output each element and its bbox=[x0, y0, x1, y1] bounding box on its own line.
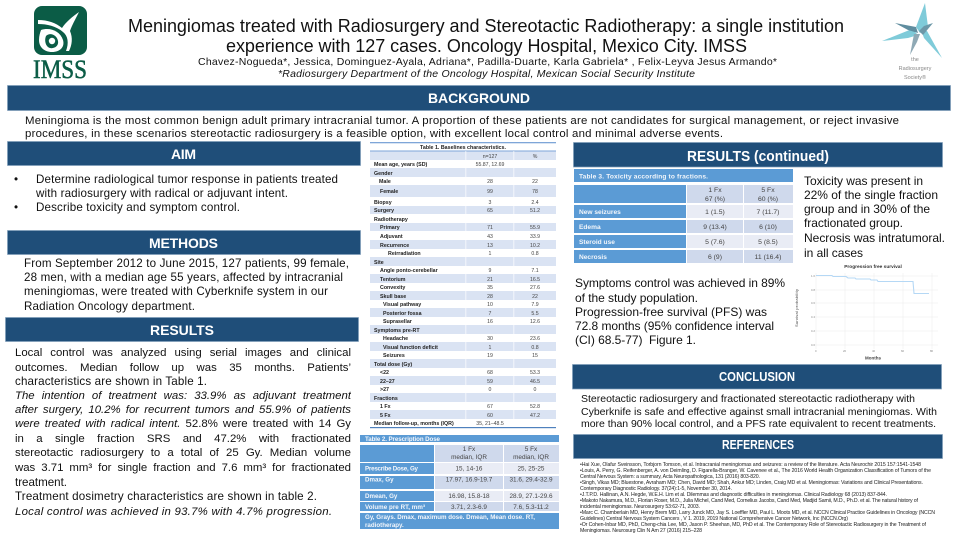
affiliation: *Radiosurgery Department of the Oncology Hospital, Mexican Social Security Institute bbox=[278, 68, 695, 80]
reference list: Central Nervous System: a summary, Acta Neuropathologica, 131 (2016) 803-820. bbox=[580, 474, 760, 480]
table 1 rows: 12.6 bbox=[530, 319, 540, 325]
axis labels: Months bbox=[865, 356, 881, 360]
table 1 rows: 3 bbox=[489, 200, 492, 206]
table 1 rows: Skull base bbox=[380, 294, 406, 300]
axis labels: 40 bbox=[872, 349, 876, 353]
table 1 rows: Gender bbox=[374, 171, 393, 177]
table 1 title: Table 1. Baselines characteristics. bbox=[420, 145, 506, 151]
symptoms and PFS text: Progression-free survival (PFS) was bbox=[575, 305, 767, 319]
table 1 rows: 16.5 bbox=[530, 277, 540, 283]
table 1 rows: Male bbox=[379, 179, 391, 185]
conclusion text: Cyberknife is safe and effective against small intracranial meningiomas. With bbox=[581, 406, 937, 418]
table 1 rows: 1 bbox=[489, 251, 492, 257]
table 1 rows: Tentorium bbox=[380, 277, 406, 283]
table 1 rows: Adjuvant bbox=[380, 234, 403, 240]
axis labels: 0 bbox=[815, 349, 817, 353]
panel: conclusion bbox=[572, 364, 942, 430]
table 2 text: 28.9, 27.1-29.6 bbox=[510, 493, 553, 500]
table 1 rows: Radiotherapy bbox=[374, 217, 408, 223]
table 1 rows: 43 bbox=[487, 234, 493, 240]
table 3 text: 1 (1.5) bbox=[705, 209, 725, 216]
panel: background bbox=[8, 86, 950, 140]
heading: background: BACKGROUND bbox=[428, 90, 530, 106]
table 3 text: Steroid use bbox=[579, 239, 615, 246]
methods text: meningiomas, were treated with Cyberknife system in our bbox=[24, 285, 328, 298]
toxicity text bbox=[804, 174, 945, 260]
results text bbox=[15, 346, 351, 518]
results text: Local control was analyzed using serial images and clinical bbox=[15, 347, 351, 359]
heading: results: RESULTS bbox=[150, 322, 214, 338]
symptoms and PFS text: 72.8 months (95% confidence interval bbox=[575, 319, 774, 333]
results text: in a single fraction SRS and 47.2% with fractionated bbox=[15, 433, 351, 445]
table 3: toxicity bbox=[574, 169, 793, 263]
reference list: •Or Cohen-Inbar MD, PhD, Cheng-chia Lee, MD, Jason P. Sheehan, MD, PhD et al. The Contemporary Role of Stereotactic Radiosurgery in the Treatment of bbox=[580, 522, 927, 528]
symptoms and PFS text: Symptoms control was achieved in 89% bbox=[575, 276, 785, 290]
title: Meningiomas treated with Radiosurgery and Stereotactic Radiotherapy: a single institution bbox=[128, 16, 844, 36]
table 1 rows: 23.6 bbox=[530, 336, 540, 342]
table 1 rows: Convexity bbox=[380, 285, 405, 291]
table 2 text: Gy, Grays. Dmax, maximum dose. Dmean, Mean dose. RT, bbox=[365, 514, 535, 521]
table 2: prescription dose bbox=[360, 435, 559, 529]
results text: stereotactic radiosurgery to a total of 25 Gy. Median volume bbox=[15, 447, 351, 459]
table 1 rows: Site bbox=[374, 260, 384, 266]
aim bullets: • bbox=[14, 201, 18, 214]
table 1 rows: >27 bbox=[380, 387, 389, 393]
table 2 text: 15, 14-16 bbox=[455, 466, 483, 472]
table 3 label column bbox=[574, 185, 686, 263]
table 1 rows: 71 bbox=[487, 225, 493, 231]
heading: references: REFERENCES bbox=[722, 437, 794, 452]
table 1 rows: 35 bbox=[487, 285, 493, 291]
icon: Radiosurgery Society logo bbox=[882, 3, 942, 81]
table 1 rows: Symptoms pre-RT bbox=[374, 328, 420, 334]
table 1 rows: 55.9 bbox=[530, 225, 540, 231]
aim bullets: • bbox=[14, 173, 18, 186]
table 1 rows: Angle ponto-cerebellar bbox=[380, 268, 438, 274]
results text: treatment. bbox=[15, 476, 67, 489]
methods text: From September 2012 to June 2015, 127 patients, 99 female, bbox=[24, 257, 349, 270]
table 1 rows: 27.6 bbox=[530, 285, 540, 291]
background text bbox=[25, 115, 899, 140]
chart: progression-free survival bbox=[794, 264, 938, 360]
reference list: •Marc C. Chamberlain MD, Henry Brem MD, Larry Junck MD, Jay S. Loeffler MD, Paul L. Moots MD, et al. NCCN Clinical Practice Guidelines in Oncology (NCCN bbox=[580, 510, 935, 516]
table 1 rows: 28 bbox=[487, 179, 493, 185]
table 2 text: 31.6, 29.4-32.9 bbox=[510, 476, 553, 484]
table 1 rows: 22 bbox=[532, 179, 538, 185]
table 3 text: 6 (10) bbox=[759, 224, 777, 231]
table 3 text: 60 (%) bbox=[758, 196, 778, 203]
toxicity text: fractionated group. bbox=[804, 216, 903, 230]
aim bullets bbox=[14, 173, 338, 214]
reference list: Guidelines) Central Nervous System Cancers , V 1. 2019, 2019 National Comprehensive Cancer Network, Inc (NCCN.Org) bbox=[580, 516, 848, 522]
table 1 rows: 99 bbox=[487, 189, 493, 195]
icon: Radiosurgery Society logo: Society® bbox=[904, 74, 926, 81]
table 1 rows: 5.5 bbox=[531, 311, 539, 317]
toxicity text: in all cases bbox=[804, 246, 863, 260]
table 1 rows: 21 bbox=[487, 277, 493, 283]
table 3 text: 1 Fx bbox=[708, 187, 722, 194]
methods text bbox=[24, 257, 349, 313]
table 1 rows: Seizures bbox=[383, 353, 405, 359]
table 1 rows: Median follow-up, months (IQR) bbox=[374, 421, 454, 427]
table 1 rows: 7 bbox=[489, 311, 492, 317]
table 1 rows: 7.1 bbox=[531, 268, 539, 274]
results text: after surgery, 10.2% for recurrent tumors and 55.9% of patients bbox=[15, 404, 351, 416]
table 1 rows: 13 bbox=[487, 243, 493, 249]
symptoms and PFS text bbox=[575, 276, 785, 347]
axis labels: Survival probability bbox=[794, 289, 799, 327]
results text: was 3.71 mm³ for single fraction and 7.6 mm³ for fractionated bbox=[15, 462, 351, 474]
authors: Chavez-Nogueda*, Jessica, Dominguez-Ayala, Adriana*, Padilla-Duarte, Karla Gabriela* , Felix-Leyva Jesus Armando* bbox=[198, 56, 777, 68]
heading: results bbox=[6, 318, 358, 342]
table 1 rows: Reirradiation bbox=[388, 251, 421, 257]
symptoms and PFS text: (CI) 68.5-77) Figure 1. bbox=[575, 333, 696, 347]
table 1 rows: 59 bbox=[487, 379, 493, 385]
table 1 rows: n=127 bbox=[483, 154, 497, 160]
table 2 text: Dmean, Gy bbox=[365, 493, 398, 500]
results text: were treated with radical intent. 52.8% were treated with 14 Gy bbox=[15, 418, 351, 430]
logo wordmark: IMSS bbox=[33, 55, 87, 84]
table 2 text: 1 Fx bbox=[463, 446, 476, 453]
table 2 text: Prescribe Dose, Gy bbox=[365, 466, 419, 472]
icon: Radiosurgery Society logo: the bbox=[911, 57, 919, 63]
table 2 text: median, IQR bbox=[451, 454, 487, 461]
heading: background bbox=[8, 86, 950, 110]
table 1 rows: Fractions bbox=[374, 396, 398, 402]
heading: results continued bbox=[574, 142, 942, 167]
table 2 text: 3.71, 2.3-6.9 bbox=[451, 504, 487, 511]
table 1 rows: 0 bbox=[489, 387, 492, 393]
heading: aim: AIM bbox=[171, 146, 196, 162]
table 2 text: 16.98, 15.8-18 bbox=[448, 493, 490, 500]
table 1 rows: Recurrence bbox=[380, 243, 409, 249]
table 1 rows: Female bbox=[380, 189, 398, 195]
table 1 rows: % bbox=[533, 154, 538, 160]
table 1 rows: Posterior fossa bbox=[383, 311, 422, 317]
results text: Treatment dosimetry characteristics are shown in table 2. bbox=[15, 490, 317, 503]
table 2 text: Volume pre RT, mm³ bbox=[365, 504, 425, 511]
table 1 rows: Headache bbox=[383, 336, 408, 342]
table 1 rows: 0 bbox=[534, 387, 537, 393]
toxicity text: Necrosis was intratumoral. bbox=[804, 231, 945, 245]
chart title: Progression free survival bbox=[844, 264, 902, 270]
table 1 rows: Mean age, years (SD) bbox=[374, 162, 428, 168]
reference list bbox=[580, 462, 935, 534]
axis labels bbox=[794, 274, 934, 360]
axis labels: 0.4 bbox=[811, 315, 815, 319]
axis labels: 20 bbox=[843, 349, 847, 353]
table 3 value cells bbox=[687, 185, 793, 263]
table 1 rows: 65 bbox=[487, 208, 493, 214]
table 1 rows: 55.87, 12.69 bbox=[476, 162, 505, 168]
table 1 rows: 33.9 bbox=[530, 234, 540, 240]
conclusion text: more than 90% local control, and a PFS rate equivalent to recent treatments. bbox=[581, 418, 936, 430]
table 3 text: 5 (7.6) bbox=[705, 239, 725, 246]
table 1 rows: Visual function deficit bbox=[383, 345, 438, 351]
table 2 text: 5 Fx bbox=[525, 446, 538, 453]
table 1 rows: <22 bbox=[380, 370, 389, 376]
heading: aim bbox=[8, 142, 360, 166]
table 1 rows: 78 bbox=[532, 189, 538, 195]
table 1 rows: 9 bbox=[489, 268, 492, 274]
table 2 text: 25, 25-25 bbox=[517, 466, 545, 472]
axis labels: 1.0 bbox=[811, 274, 815, 278]
table 1: baseline characteristics bbox=[370, 142, 556, 428]
table 1 rows: Primary bbox=[380, 225, 400, 231]
symptoms and PFS text: of the study population. bbox=[575, 291, 698, 305]
table 1 rows: 67 bbox=[487, 404, 493, 410]
panel: results continued bbox=[574, 142, 945, 360]
table 2: prescription dose: Table 2. Prescription Dose bbox=[365, 436, 441, 443]
table 1 shaded rows bbox=[370, 152, 556, 419]
results text: The intention of treatment was: 33.9% as adjuvant treatment bbox=[15, 390, 351, 402]
survival curve bbox=[816, 276, 929, 294]
table 1 rows: 16 bbox=[487, 319, 493, 325]
axis labels: 0.6 bbox=[811, 301, 815, 305]
heading: results continued: RESULTS (continued) bbox=[687, 149, 829, 165]
table 2 text: radiotherapy. bbox=[365, 522, 404, 529]
heading: conclusion bbox=[572, 364, 942, 389]
table 3 text: 7 (11.7) bbox=[757, 209, 779, 216]
table 2 text: 7.6, 5.3-11.2 bbox=[513, 504, 549, 511]
methods text: Radiation Oncology department. bbox=[24, 300, 195, 313]
table 1 rows: Visual pathway bbox=[383, 302, 421, 308]
aim bullets: Determine radiological tumor response in patients treated bbox=[36, 173, 338, 186]
table 3 text: 9 (13.4) bbox=[703, 224, 727, 231]
icon: Radiosurgery Society logo: Radiosurgery bbox=[899, 66, 932, 72]
axis labels: 0.0 bbox=[811, 343, 815, 347]
table 2 text bbox=[365, 446, 553, 529]
toxicity text: group and in 30% of the bbox=[804, 202, 930, 216]
reference list: Meningiomas. Neurosurg Clin N Am 27 (2016) 215–228 bbox=[580, 528, 702, 534]
table 1 rows: 52.8 bbox=[530, 404, 540, 410]
table 1 rows: 47.2 bbox=[530, 413, 540, 419]
panel: methods bbox=[8, 230, 360, 313]
table 1 rows: 51.2 bbox=[530, 208, 540, 214]
panel: references bbox=[574, 434, 942, 534]
table 2 text: Dmax, Gy bbox=[365, 476, 394, 484]
title: experience with 127 cases. Oncology Hospital, Mexico City. IMSS bbox=[226, 36, 747, 56]
axis labels: 80 bbox=[930, 349, 934, 353]
table 1 rows: 22 bbox=[532, 294, 538, 300]
table 3 text: 5 (8.5) bbox=[758, 239, 778, 246]
table 1 rows: 0.8 bbox=[531, 251, 539, 257]
table 1 rows: 28 bbox=[487, 294, 493, 300]
table 1 rows: 46.5 bbox=[530, 379, 540, 385]
table 1 rows: 53.3 bbox=[530, 370, 540, 376]
table 1 rows: 2.4 bbox=[531, 200, 539, 206]
table 2 text: 17.97, 16.9-19.7 bbox=[446, 476, 493, 484]
table 2 label column bbox=[360, 445, 559, 529]
heading: methods: METHODS bbox=[149, 235, 218, 251]
table 3 text: 6 (9) bbox=[708, 254, 722, 261]
table 1 rows: 5 Fx bbox=[380, 413, 391, 419]
panel: aim bbox=[8, 142, 360, 214]
table 1 rows: 68 bbox=[487, 370, 493, 376]
table 1 rows: 7.9 bbox=[531, 302, 539, 308]
heading: references bbox=[574, 434, 942, 458]
axis labels: 0.2 bbox=[811, 329, 815, 333]
axis labels: 0.8 bbox=[811, 288, 815, 292]
table 1 rows: 10 bbox=[487, 302, 493, 308]
table 1 rows: 10.2 bbox=[530, 243, 540, 249]
axis labels: 60 bbox=[901, 349, 905, 353]
table 1 rows: 15 bbox=[532, 353, 538, 359]
table 1 rows bbox=[374, 154, 540, 427]
table 1 rows: 0.8 bbox=[531, 345, 539, 351]
reference list: Contemporary Diagnostic Radiology. 37(24):1-5, November 30, 2014. bbox=[580, 486, 732, 492]
table 1 rows: Surgery bbox=[374, 208, 394, 214]
conclusion text bbox=[581, 393, 937, 430]
table 1 rows: 22–27 bbox=[380, 379, 395, 385]
table 1 rows: 35, 21–48.5 bbox=[476, 421, 504, 427]
toxicity text: 22% of the single fraction bbox=[804, 188, 938, 202]
reference list: •Makoto Nakamura, M.D., Florian Roser, M.D., Julia Michel, Cand Med, Cornelius Jacobs, Cand Med, Madjid Samii, M.D., Ph.D. et al. The natural history of bbox=[580, 498, 919, 504]
aim bullets: with radiosurgery with radical or adjuvant intent. bbox=[35, 187, 288, 200]
table 3 text: 11 (16.4) bbox=[755, 254, 781, 261]
conclusion text: Stereotactic radiosurgery and fractionated stereotactic radiotherapy with bbox=[581, 393, 915, 405]
heading: methods bbox=[8, 230, 360, 254]
reference list: •Louis, A. Perry, G. Reifenberger, A. von Deimling, D. Figarella-Branger, W. Cavenee et al., The 2016 World Health Organization Classification of Tumors of the bbox=[580, 468, 931, 474]
table 1 rows: 19 bbox=[487, 353, 493, 359]
toxicity text: Toxicity was present in bbox=[804, 174, 923, 188]
table 1 rows: Suprasellar bbox=[383, 319, 412, 325]
reference list: •Hai Xue, Olafur Sveinsson, Torbjorn Tomson, et al. Intracranial meningiomas and seizures: a review of the literature. Acta Neurochir 2015 157:1541-1548 bbox=[580, 462, 921, 468]
table 2 value cells bbox=[435, 445, 559, 511]
methods text: 28 men, with a median age 55 years, affected by intracranial bbox=[24, 271, 343, 284]
table 1 rows: Total dose (Gy) bbox=[374, 362, 412, 368]
table 3 text: New seizures bbox=[579, 209, 621, 216]
table 3 text: 67 (%) bbox=[705, 196, 725, 203]
table 2 text: median, IQR bbox=[513, 454, 549, 461]
table 3: toxicity: Table 3. Toxicity according to fractions. bbox=[579, 174, 708, 180]
table 3 text: Necrosis bbox=[579, 254, 607, 261]
table 1 rows: 60 bbox=[487, 413, 493, 419]
table 1 rows: 1 bbox=[489, 345, 492, 351]
table 1 rows: Biopsy bbox=[374, 200, 392, 206]
table 3 text bbox=[579, 187, 781, 261]
panel: results bbox=[6, 318, 358, 518]
table 1 rows: 1 Fx bbox=[380, 404, 391, 410]
results text: outcomes. Median follow up was 35 months. Patients’ bbox=[15, 362, 351, 374]
reference list: •Singh, Vikas MD; Bluestone, Avraham MD; Chen, David MD; Shah, Ankur MD; Linden, Craig MD et al. Meningiomas: Variations and Clinical Presentations. bbox=[580, 480, 923, 486]
table 3 text: Edema bbox=[579, 224, 601, 231]
reference list: •J.T.P.D. Hallinan, A.N. Hegde, W.E.H. Lim et al. Dilemmas and diagnostic difficulties in meningiomas. Clinical Radiology 68 (2013) 837-844. bbox=[580, 492, 887, 498]
background text: procedures, in these scenarios stereotactic radiosurgery is a feasible option, with excellent local control and minimal adverse events. bbox=[25, 128, 723, 140]
background text: Meningioma is the most common benign adult primary intracranial tumor. A proportion of these patients are not candidates for surgical management, or reject invasive bbox=[25, 115, 899, 127]
reference list: incidental meningiomas. Neurosurgery 53:62-71, 2003. bbox=[580, 504, 700, 510]
heading: conclusion: CONCLUSION bbox=[719, 369, 795, 384]
results text: characteristics are shown in Table 1. bbox=[15, 375, 207, 388]
aim bullets: Describe toxicity and symptom control. bbox=[36, 201, 240, 214]
table 1 rows: 30 bbox=[487, 336, 493, 342]
results text: Local control was achieved in 93.7% with 4.7% progression. bbox=[15, 506, 332, 518]
table 3 text: 5 Fx bbox=[761, 187, 775, 194]
title bbox=[128, 16, 844, 56]
icon: IMSS logo bbox=[33, 6, 87, 84]
